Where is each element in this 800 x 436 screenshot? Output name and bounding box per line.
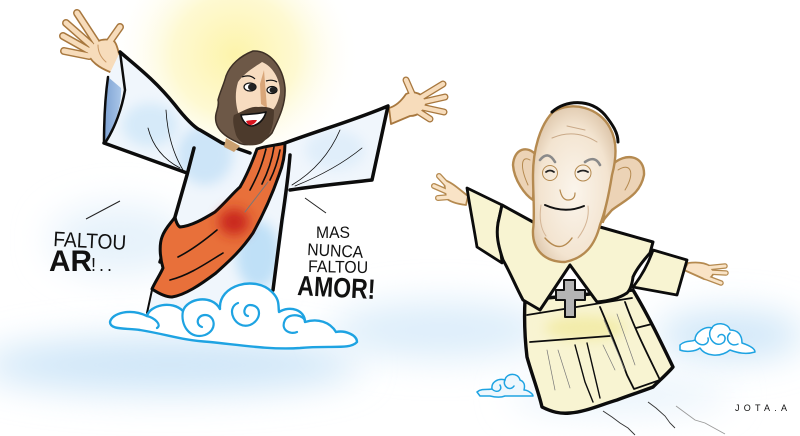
pope face bbox=[533, 106, 616, 262]
right sleeve bbox=[633, 250, 687, 295]
speech: Mas nunca faltou amor: MAS bbox=[316, 223, 350, 242]
robe shading bbox=[122, 103, 365, 289]
left sleeve lining bbox=[105, 77, 121, 143]
eyes bbox=[242, 76, 277, 94]
speech: Faltou ar bbox=[49, 228, 127, 278]
speech: Faltou ar: FALTOU bbox=[53, 228, 127, 255]
head bbox=[216, 51, 285, 152]
speech: Mas nunca faltou amor: AMOR! bbox=[297, 270, 376, 305]
ears bbox=[513, 149, 644, 222]
signature: JOTA.A bbox=[735, 403, 787, 413]
small cloud left bbox=[477, 374, 533, 397]
speech: Faltou ar: !.. bbox=[91, 255, 112, 275]
neck bbox=[224, 138, 240, 152]
robe outlines bbox=[104, 52, 388, 313]
motion lines bbox=[603, 402, 725, 435]
icon: Pope left hand bbox=[434, 176, 468, 205]
left sleeve bbox=[467, 188, 502, 263]
speech: Mas nunca faltou amor bbox=[297, 223, 376, 305]
icon: Jesus left hand bbox=[63, 13, 124, 82]
icon: Pope right hand bbox=[684, 262, 726, 283]
skullcap bbox=[552, 103, 618, 142]
face bbox=[236, 62, 280, 118]
mouth bbox=[241, 112, 266, 126]
hair bbox=[216, 51, 285, 145]
cassock bbox=[525, 290, 673, 413]
speech: Mas nunca faltou amor: FALTOU bbox=[308, 257, 368, 277]
cloud swirls bbox=[147, 303, 305, 336]
figure: Pope bbox=[434, 103, 755, 413]
orange sash bbox=[152, 143, 285, 297]
speech lines bbox=[86, 198, 326, 219]
pectoral cross bbox=[556, 280, 585, 317]
cloud under Jesus bbox=[110, 284, 357, 348]
speech: Mas nunca faltou amor: NUNCA bbox=[307, 240, 364, 262]
robe bbox=[104, 52, 388, 313]
beard bbox=[233, 107, 274, 145]
speech: Faltou ar: AR bbox=[49, 245, 92, 278]
cassock shading bbox=[545, 316, 625, 340]
small cloud right bbox=[680, 324, 755, 355]
mozzetta bbox=[497, 205, 653, 310]
facial features bbox=[540, 126, 600, 246]
icon: Jesus right hand bbox=[389, 80, 445, 124]
sash panel and cincture lines bbox=[527, 298, 673, 402]
figure: Jesus bbox=[63, 13, 445, 348]
